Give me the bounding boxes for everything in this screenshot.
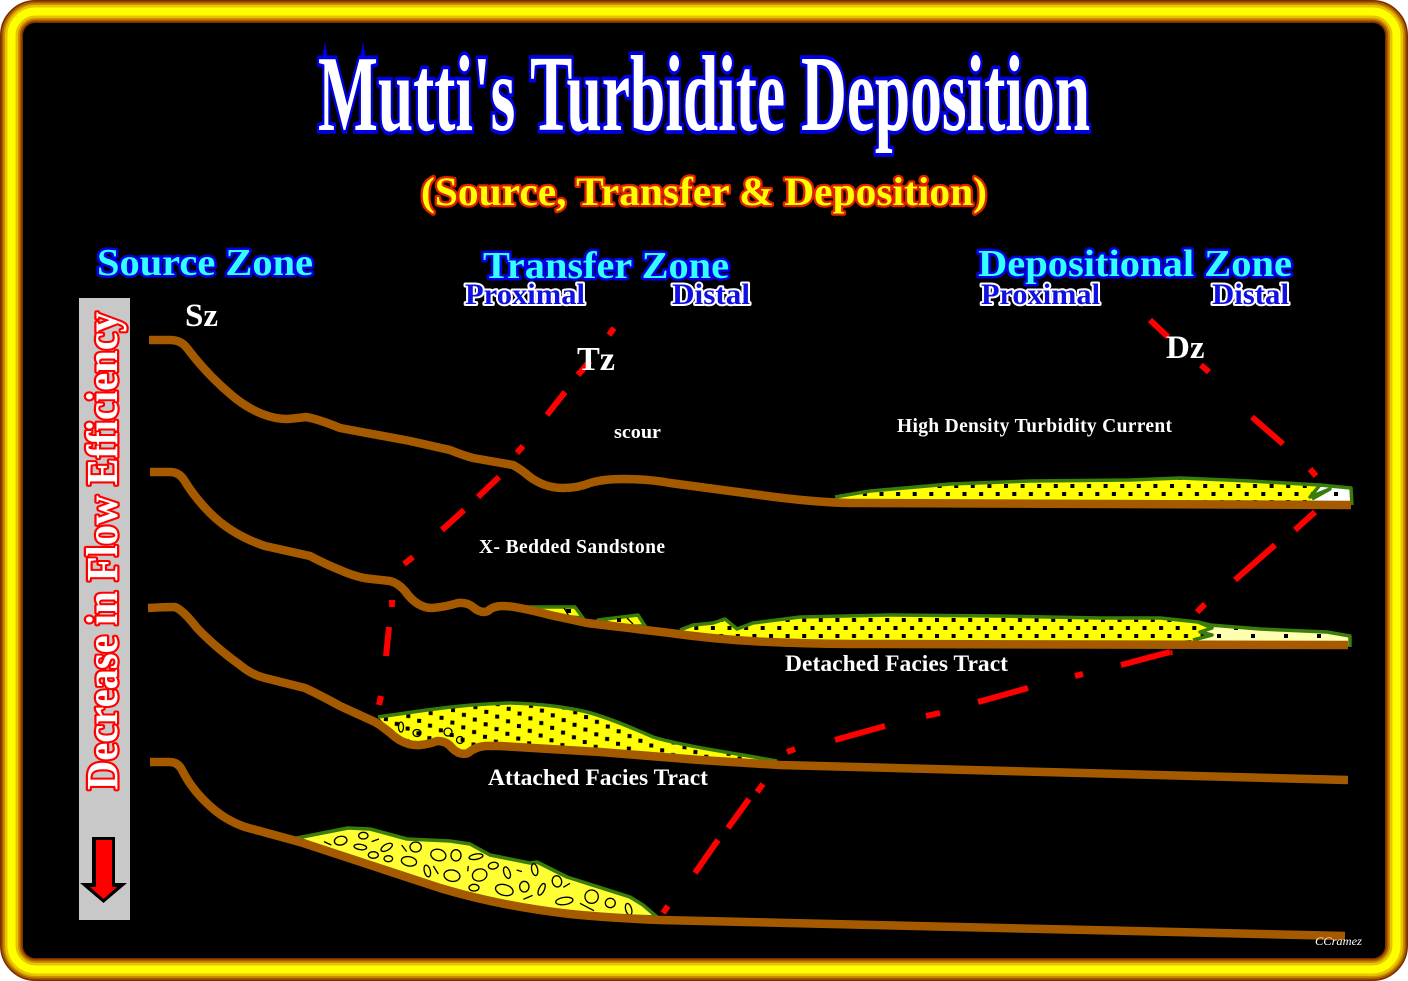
deposit: high density sandstone lobe <box>835 478 1352 505</box>
deposit: detached facies small patches <box>527 607 645 626</box>
profile: surface 1 <box>149 340 1351 505</box>
label: attached facies tract: Attached Facies Tract <box>488 765 708 791</box>
pebbles <box>324 832 633 916</box>
icon: red down arrow <box>80 837 127 903</box>
label: x-bedded sandstone: X- Bedded Sandstone <box>479 537 665 558</box>
label: Tz: Tz <box>577 341 615 378</box>
subtitle: (Source, Transfer & Deposition) <box>421 169 987 214</box>
dashed line: transfer zone boundary <box>379 328 614 705</box>
label: transfer distal: Distal <box>672 278 750 311</box>
heading: transfer zone: Transfer Zone <box>483 245 729 287</box>
vertical label: decrease in flow efficiency: Decrease in Flow Efficiency <box>78 312 127 790</box>
credit: CCramez <box>1315 934 1362 948</box>
panel: flow efficiency bar <box>78 298 130 920</box>
profile: surface 4 <box>150 762 1345 936</box>
heading: source zone: Source Zone <box>97 242 313 284</box>
small pebbles in the scour <box>398 722 464 744</box>
label: depositional proximal: Proximal <box>981 278 1100 311</box>
label: detached facies tract: Detached Facies Tract <box>785 651 1008 677</box>
label: Sz: Sz <box>185 298 218 334</box>
dashed line: detached facies boundary <box>1171 512 1315 655</box>
deposit: conglomerate wedge <box>297 828 657 917</box>
label: high density turbidity current: High Density Turbidity Current <box>897 416 1172 437</box>
profile: surface 2 <box>150 472 1348 645</box>
heading: depositional zone: Depositional Zone <box>978 243 1292 285</box>
label: scour: scour <box>614 423 661 443</box>
dashed line: depositional zone boundary <box>1150 320 1316 476</box>
dashed line: attached facies boundary <box>663 652 1170 913</box>
deposit: attached sandstone lobe <box>378 703 777 762</box>
label: depositional distal: Distal <box>1212 278 1289 311</box>
label: transfer proximal: Proximal <box>465 278 585 311</box>
label: Dz: Dz <box>1166 330 1204 366</box>
deposit: detached sandstone lobe <box>680 615 1350 647</box>
profile: surface 3 <box>148 607 1348 780</box>
